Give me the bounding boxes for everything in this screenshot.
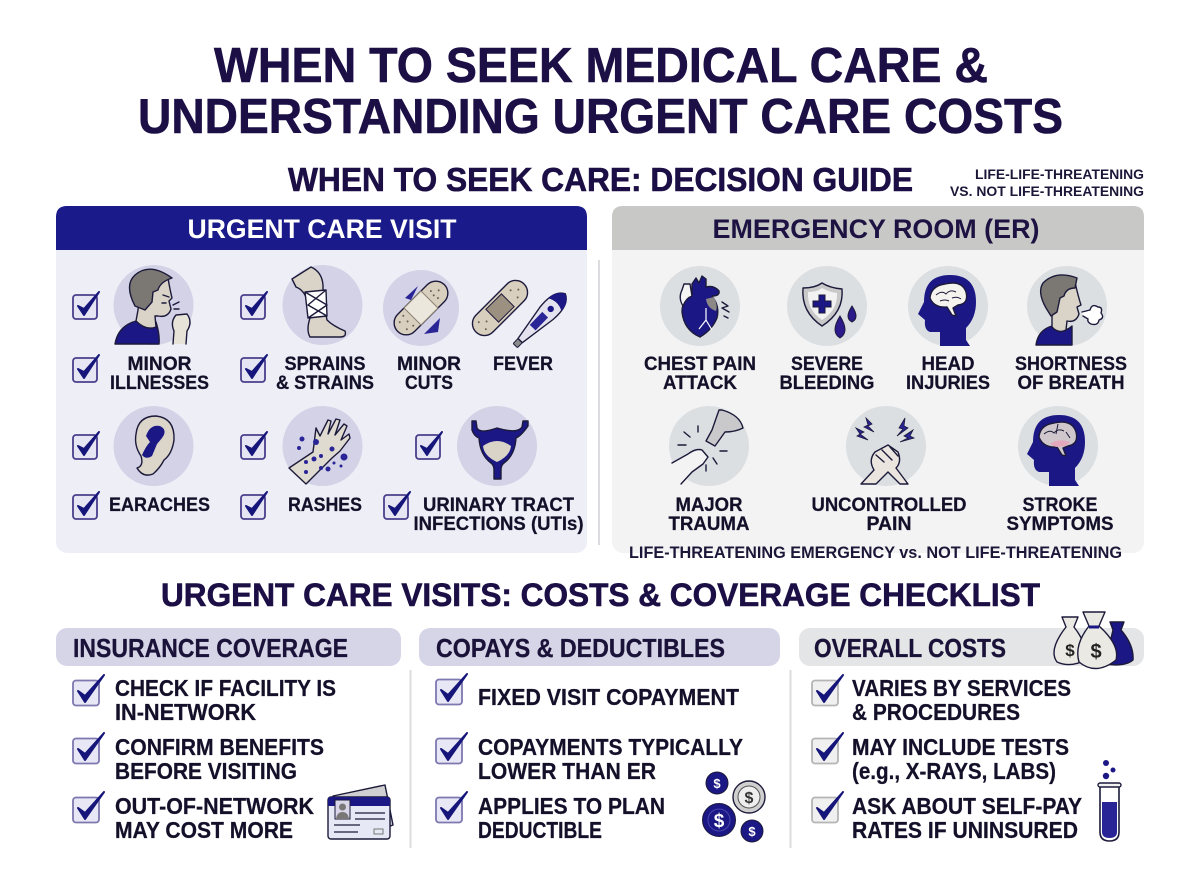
checklist: insurance: CONFIRM BENEFITS	[115, 734, 324, 760]
labels: urgent care conditions: EARACHES	[109, 495, 210, 516]
icon: coins: $	[745, 790, 754, 807]
icon: coins: $	[713, 776, 721, 791]
icon: bleeding	[787, 266, 867, 346]
checklist: copays: FIXED VISIT COPAYMENT	[478, 684, 739, 710]
title: UNDERSTANDING URGENT CARE COSTS	[138, 90, 1063, 144]
labels: urgent care conditions: ILLNESSES	[110, 373, 209, 394]
icon: rash on arm	[282, 406, 362, 486]
icon: heart	[660, 266, 740, 346]
panel: overall costs	[799, 612, 1144, 843]
labels: emergency conditions: CHEST PAIN	[644, 354, 756, 375]
checklist: overall costs: & PROCEDURES	[852, 699, 1020, 725]
panel header: urgent care	[56, 206, 587, 250]
labels: urgent care conditions: & STRAINS	[276, 373, 374, 394]
heading: costs and coverage: URGENT CARE VISITS: COSTS & COVERAGE CHECKLIST	[161, 577, 1040, 613]
panel: copays and deductibles	[419, 628, 780, 843]
panel: urgent care visit	[56, 206, 587, 553]
labels: urgent care conditions: RASHES	[288, 495, 362, 516]
labels: urgent care conditions: INFECTIONS (UTIs)	[414, 514, 584, 535]
icon: coins	[702, 772, 765, 842]
checklist: copays: COPAYMENTS TYPICALLY	[478, 734, 743, 760]
icon: insurance card	[328, 785, 393, 839]
checklist: overall costs: RATES IF UNINSURED	[852, 817, 1078, 843]
checklist: insurance	[73, 675, 336, 843]
icon: ear	[114, 406, 194, 486]
checklist: overall costs: ASK ABOUT SELF-PAY	[852, 793, 1082, 819]
icon: stroke	[1018, 406, 1098, 486]
panel header: urgent care: URGENT CARE VISIT	[188, 214, 457, 244]
labels: emergency conditions	[644, 354, 1127, 535]
icon: coins: $	[714, 811, 725, 832]
labels: emergency conditions: INJURIES	[906, 373, 990, 394]
checklist: insurance: IN-NETWORK	[115, 699, 256, 725]
icon: money bags: $	[1090, 641, 1102, 663]
labels: urgent care conditions	[109, 354, 584, 535]
checklist: overall costs: MAY INCLUDE TESTS	[852, 734, 1069, 760]
checklist: overall costs	[812, 675, 1082, 843]
checklist: copays: APPLIES TO PLAN	[478, 793, 665, 819]
pill: insurance coverage: INSURANCE COVERAGE	[73, 633, 348, 663]
labels: urgent care conditions: SPRAINS	[284, 354, 366, 375]
title: WHEN TO SEEK MEDICAL CARE &	[214, 39, 988, 93]
heading: decision guide: WHEN TO SEEK CARE: DECISION GUIDE	[288, 161, 913, 198]
labels: emergency conditions: PAIN	[866, 514, 912, 535]
icon: urinary tract	[457, 406, 537, 486]
checklist: insurance: CHECK IF FACILITY IS	[115, 675, 336, 701]
panel: insurance coverage	[56, 628, 401, 843]
labels: emergency conditions: ATTACK	[663, 373, 737, 394]
pill: overall costs: OVERALL COSTS	[814, 633, 1006, 663]
checklist: insurance: BEFORE VISITING	[115, 758, 297, 784]
panel header: emergency room	[612, 206, 1144, 250]
icon: test tube	[1098, 760, 1121, 841]
labels: emergency conditions: SEVERE	[791, 354, 863, 375]
labels: urgent care conditions: MINOR	[397, 354, 461, 375]
title	[138, 39, 1063, 144]
labels: emergency conditions: BLEEDING	[780, 373, 874, 394]
pill: overall costs	[799, 628, 1144, 666]
labels: emergency conditions: SYMPTOMS	[1006, 514, 1114, 535]
labels: emergency conditions: UNCONTROLLED	[812, 495, 966, 516]
note: life-threatening: VS. NOT LIFE-THREATENING	[950, 184, 1144, 199]
labels: emergency conditions: OF BREATH	[1018, 373, 1124, 394]
note: life-threatening: LIFE-LIFE-THREATENING	[975, 167, 1144, 182]
labels: emergency conditions: SHORTNESS	[1015, 354, 1127, 375]
checkboxes: urgent care	[73, 292, 442, 519]
icon: head injury	[908, 266, 988, 346]
icon: coins: $	[748, 824, 756, 839]
icon: uncontrolled pain	[846, 406, 926, 486]
labels: emergency conditions: HEAD	[922, 354, 974, 375]
checklist: insurance: OUT-OF-NETWORK	[115, 793, 314, 819]
pill: copays: COPAYS & DEDUCTIBLES	[436, 633, 725, 663]
checklist: insurance: MAY COST MORE	[115, 817, 293, 843]
labels: urgent care conditions: URINARY TRACT	[423, 495, 574, 516]
labels: emergency conditions: TRAUMA	[668, 514, 750, 535]
labels: urgent care conditions: CUTS	[405, 373, 453, 394]
icon: coughing person	[114, 265, 194, 345]
panel header: emergency room: EMERGENCY ROOM (ER)	[712, 214, 1040, 244]
icon: bandaged leg	[282, 265, 362, 345]
icon: bandage and thermometer	[467, 275, 572, 352]
icon: shortness of breath	[1027, 266, 1107, 346]
labels: emergency conditions: STROKE	[1022, 495, 1098, 516]
checklist: overall costs: VARIES BY SERVICES	[852, 675, 1071, 701]
checklist: copays	[436, 674, 743, 843]
checklist: overall costs: (e.g., X-RAYS, LABS)	[852, 758, 1056, 784]
labels: emergency conditions: MAJOR	[676, 495, 743, 516]
labels: urgent care conditions: FEVER	[493, 354, 553, 375]
labels: urgent care conditions: MINOR	[128, 354, 192, 375]
caption: life-threatening emergency: LIFE-THREATENING EMERGENCY vs. NOT LIFE-THREATENING	[629, 544, 1122, 562]
note: life-threatening	[950, 167, 1144, 199]
panel: emergency room	[612, 206, 1144, 553]
icon: major trauma	[669, 406, 749, 486]
icon: money bags	[1054, 612, 1133, 669]
icon: bandage	[383, 270, 459, 346]
checklist: copays: LOWER THAN ER	[478, 758, 656, 784]
icon: money bags: $	[1065, 641, 1075, 660]
checklist: copays: DEDUCTIBLE	[478, 817, 602, 843]
